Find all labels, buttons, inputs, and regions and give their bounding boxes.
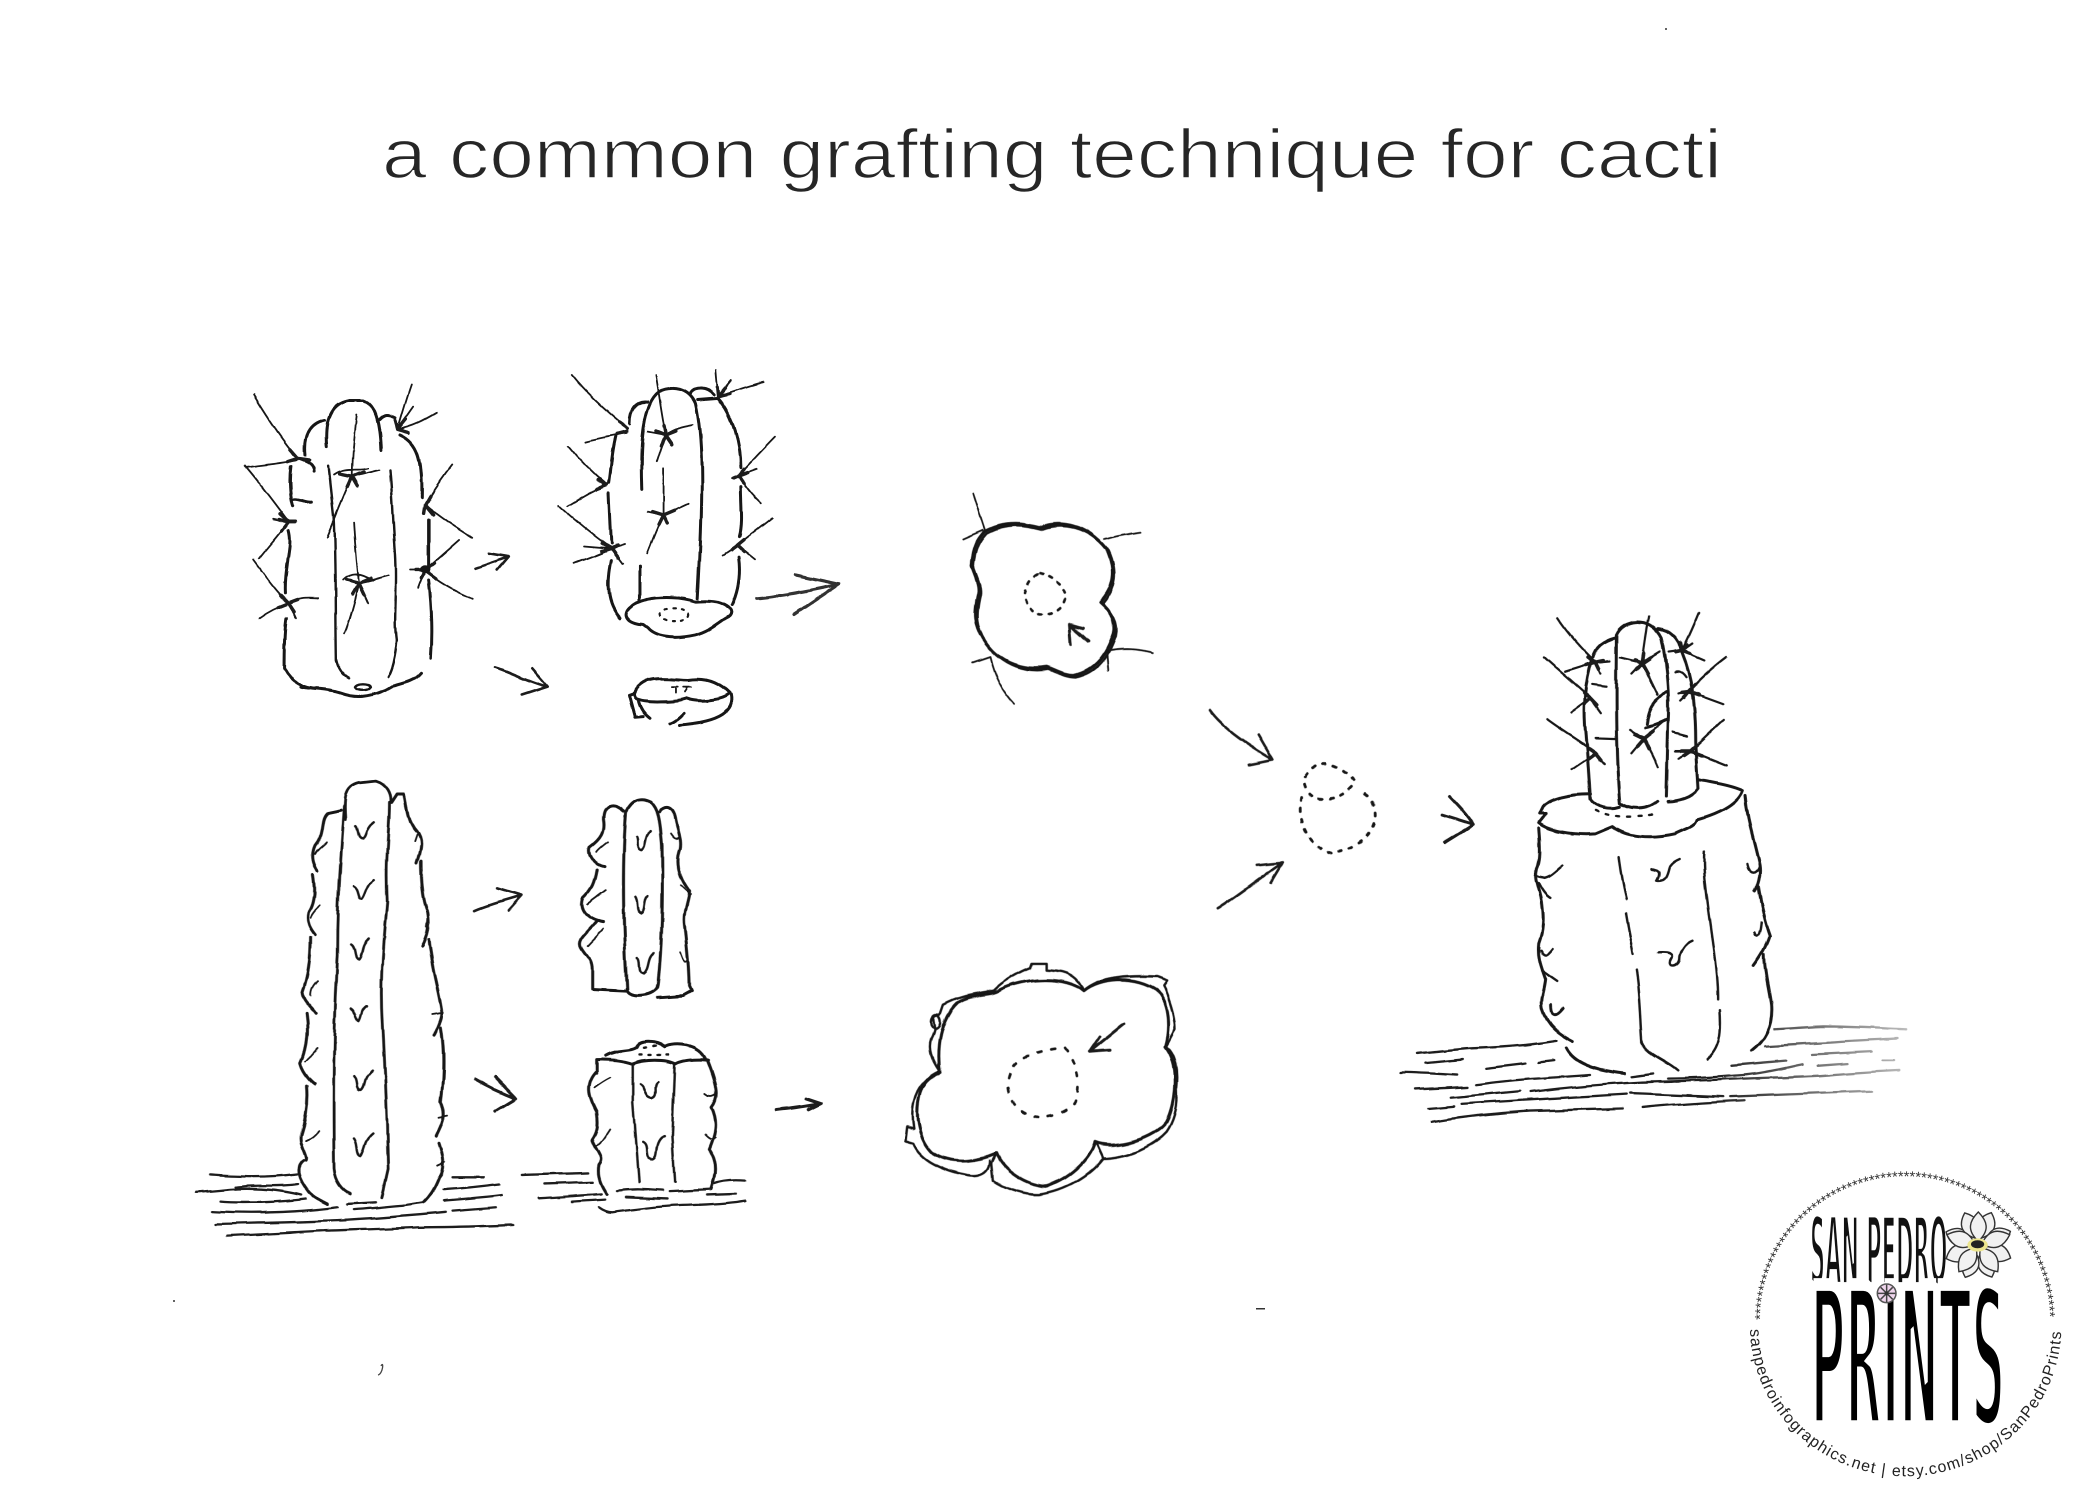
arrow	[1218, 862, 1283, 908]
logo: San Pedro Prints	[1750, 1171, 2062, 1480]
specks	[173, 28, 1667, 1375]
cactus with cut base	[558, 370, 775, 637]
panel: bottom-row stock	[196, 781, 821, 1236]
panel: cut faces and union	[905, 493, 1375, 1194]
hand-drawn illustrations	[196, 370, 1906, 1236]
arrow	[475, 888, 521, 911]
logo: website text: sanpedroinfographics.net | etsy.com/shop/SanPedroPrints	[1750, 1330, 2062, 1480]
arrow	[475, 553, 509, 570]
arrow	[475, 1077, 516, 1111]
arrow	[1210, 711, 1273, 765]
whole cactus with spines	[245, 385, 473, 696]
tall cactus	[196, 781, 513, 1236]
arrow	[1442, 796, 1473, 842]
grafted scion	[1544, 612, 1727, 808]
severed top piece	[580, 800, 691, 997]
scion cross-section	[963, 493, 1153, 705]
title: a common grafting technique for cacti	[382, 115, 1722, 193]
arrow	[757, 575, 839, 615]
panel: finished graft	[1401, 612, 1906, 1122]
logo: Prints wordmark: PRINTS	[1811, 1247, 2005, 1473]
rootstock	[1536, 780, 1772, 1074]
logo: star ring: ******************************************************************************	[1754, 1171, 2055, 1358]
icon: pink flower	[1877, 1284, 1896, 1303]
icon: white flower	[1943, 1210, 2014, 1280]
cut stump	[522, 1042, 745, 1212]
stock cross-section	[905, 963, 1177, 1194]
arrow	[777, 1098, 821, 1110]
removed slice	[630, 679, 731, 725]
logo: San Pedro wordmark: SAN PEDRO	[1810, 1197, 1947, 1308]
panel: top-row cuttings	[245, 370, 839, 725]
dotted union of cut faces	[1301, 765, 1375, 853]
arrow	[495, 667, 548, 695]
ground hatching	[1401, 1026, 1906, 1122]
